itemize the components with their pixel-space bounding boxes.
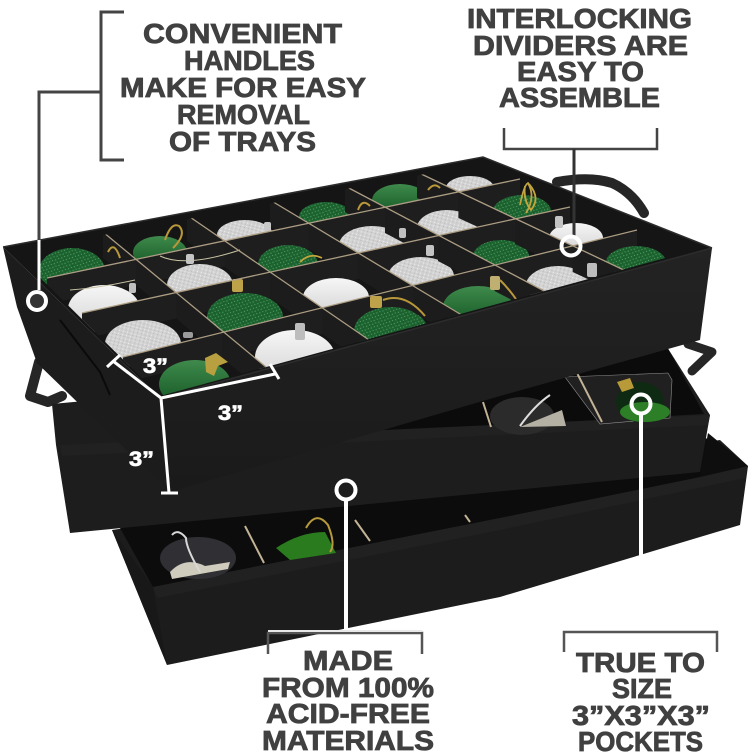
- tray left wall: [3, 247, 168, 490]
- top tray: [2, 156, 712, 430]
- row of ornaments 2: [68, 184, 570, 339]
- dimension label: length: 3”: [218, 402, 243, 425]
- row of ornaments 3: [105, 183, 637, 383]
- heading: convenient handles: HANDLES: [184, 45, 315, 76]
- ornament: green in bottom tray: [276, 518, 336, 560]
- heading: true to size: 3”X3”X3”: [572, 700, 710, 731]
- heading: acid-free materials: [262, 645, 434, 755]
- callout: pocket size: [564, 394, 717, 652]
- heading: convenient handles: REMOVAL: [177, 99, 310, 130]
- heading: interlocking dividers: ASSEMBLE: [499, 82, 660, 113]
- callout: materials: [268, 480, 422, 654]
- bottom tray: [112, 433, 748, 665]
- heading: interlocking dividers: DIVIDERS ARE: [473, 30, 688, 61]
- heading: convenient handles: [120, 18, 366, 157]
- row of ornaments 1: [39, 172, 520, 304]
- heading: true to size: [572, 647, 710, 755]
- icon: carry handles: [30, 179, 712, 402]
- tray front wall: [160, 248, 712, 492]
- heading: interlocking dividers: INTERLOCKING: [467, 3, 692, 34]
- dimension lines: 3 by 3 by 3: [107, 355, 279, 493]
- heading: interlocking dividers: EASY TO: [517, 56, 644, 87]
- row of ornaments 4: [159, 246, 666, 408]
- tan divider edges: [47, 172, 637, 377]
- heading: convenient handles: OF TRAYS: [169, 126, 316, 157]
- middle tray: [52, 347, 710, 533]
- heading: convenient handles: CONVENIENT: [143, 18, 342, 49]
- callout: dividers: [504, 128, 657, 256]
- heading: acid-free materials: MADE: [303, 645, 393, 676]
- ornament: silver in bottom tray: [160, 532, 236, 579]
- heading: true to size: TRUE TO: [576, 647, 705, 678]
- card: inner divider: [565, 373, 672, 424]
- heading: convenient handles: MAKE FOR EASY: [120, 72, 366, 103]
- heading: acid-free materials: FROM 100%: [262, 672, 434, 703]
- dimension label: height: 3”: [129, 448, 154, 471]
- heading: acid-free materials: ACID-FREE: [266, 698, 430, 729]
- dimension label: width: 3”: [143, 355, 168, 378]
- heading: interlocking dividers: [467, 3, 692, 113]
- heading: true to size: SIZE: [612, 673, 672, 704]
- tray interior: [3, 157, 712, 398]
- callout: handles: [28, 12, 124, 310]
- ornament: green in middle tray: [616, 378, 670, 422]
- ornament: silver in middle tray: [490, 395, 566, 435]
